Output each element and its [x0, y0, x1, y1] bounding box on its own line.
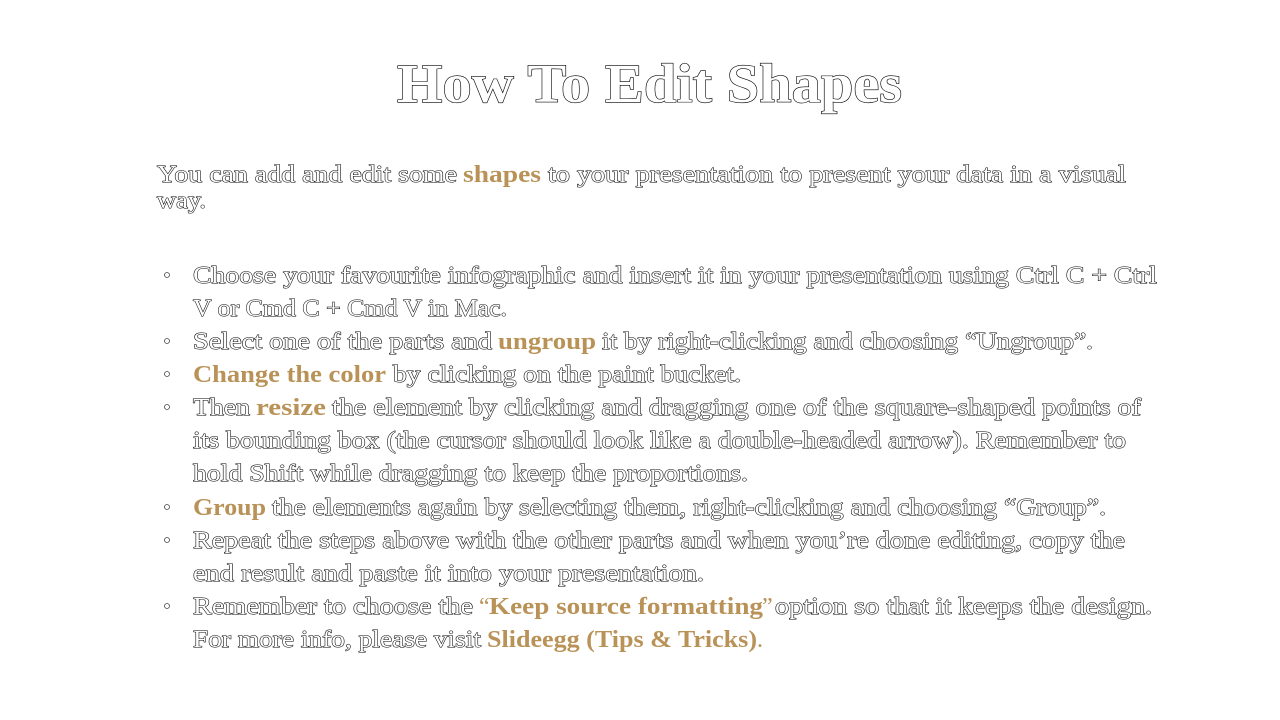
bullet: keep source formatting: ”	[762, 594, 773, 620]
bullet: keep source formatting: “	[479, 594, 490, 620]
bullet: resize: resize	[256, 395, 326, 421]
bullet: keep source formatting: Remember to choose the	[193, 594, 473, 620]
intro paragraph: to your presentation to present your data in a visual	[548, 162, 1126, 188]
bullet: choose infographic	[164, 263, 1157, 322]
intro paragraph: way.	[157, 188, 206, 214]
bullet: change the color: by clicking on the paint bucket.	[393, 362, 741, 388]
bullet: keep source formatting: Slideegg (Tips & Tricks)	[487, 627, 757, 653]
bullet: resize: its bounding box (the cursor should look like a double-headed arrow). Remember to	[193, 428, 1126, 454]
bullet: choose infographic: V or Cmd C + Cmd V in Mac.	[193, 296, 507, 322]
intro paragraph: shapes	[463, 162, 541, 188]
bullet: keep source formatting: For more info, please visit	[193, 627, 481, 653]
bullet: keep source formatting	[164, 594, 1152, 653]
bullet: keep source formatting: option so that it keeps the design.	[775, 594, 1152, 620]
bullet: change the color: Change the color	[193, 362, 386, 388]
bullet: keep source formatting: .	[757, 627, 763, 653]
bullet: change the color	[164, 362, 741, 388]
bullet: resize	[164, 395, 1141, 487]
bullet: keep source formatting: Keep source formatting	[489, 594, 763, 620]
bullet: ungroup: Select one of the parts and	[193, 329, 492, 355]
bullet: repeat the steps: end result and paste it into your presentation.	[193, 561, 704, 587]
bullet: resize: the element by clicking and dragging one of the square-shaped points of	[332, 395, 1141, 421]
bullet: ungroup	[164, 329, 1093, 355]
intro paragraph: You can add and edit some	[157, 162, 457, 188]
bullet: ungroup: ungroup	[498, 329, 596, 355]
bullet: group: the elements again by selecting them, right-clicking and choosing “Group”.	[272, 495, 1106, 521]
bullet: repeat the steps	[164, 528, 1125, 587]
title: How To Edit Shapes	[397, 53, 902, 114]
bullet: group: Group	[193, 495, 266, 521]
bullet: ungroup: it by right-clicking and choosing “Ungroup”.	[602, 329, 1093, 355]
bullet list	[164, 263, 1157, 653]
bullet: choose infographic: Choose your favourite infographic and insert it in your presentation using Ctrl C + Ctrl	[193, 263, 1157, 289]
bullet: resize: Then	[193, 395, 250, 421]
bullet: repeat the steps: Repeat the steps above with the other parts and when you’re done editing, copy the	[193, 528, 1125, 554]
intro paragraph	[157, 162, 1126, 214]
bullet: resize: hold Shift while dragging to keep the proportions.	[193, 461, 748, 487]
